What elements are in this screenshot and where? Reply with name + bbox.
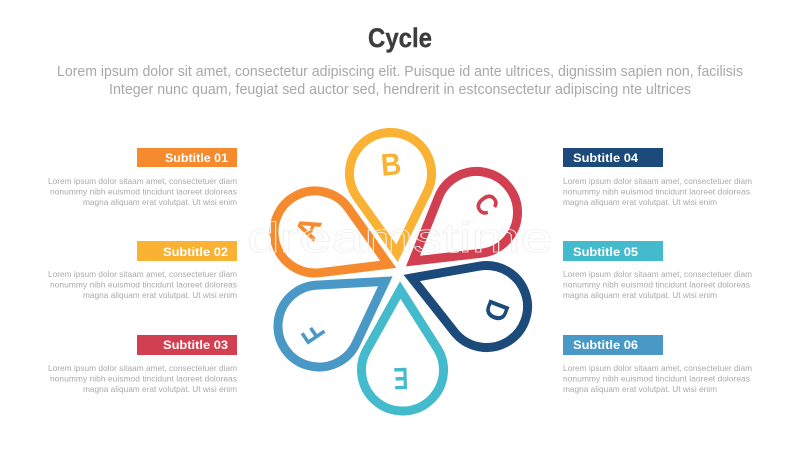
label: subtitle 02: Subtitle 02 — [163, 245, 228, 259]
text block: subtitle 05: nonummy nibh euismod tincidunt laoreet doloreas — [563, 280, 750, 290]
letter D: D — [476, 295, 516, 326]
letter E: E — [393, 361, 409, 396]
text block: subtitle 05 — [563, 269, 752, 300]
text block: subtitle 04: nonummy nibh euismod tincidunt laoreet doloreas — [563, 186, 750, 196]
label: subtitle 06 — [563, 335, 663, 355]
text block: subtitle 05: Lorem ipsum dolor sitaam amet, consectetuer diam — [563, 269, 752, 279]
label: subtitle 04 — [563, 148, 663, 167]
panel: subtitle 01 — [48, 148, 237, 207]
panel: subtitle 03 — [48, 335, 237, 394]
panel: subtitle 05 — [563, 241, 752, 300]
text block: subtitle 03 — [48, 363, 237, 394]
intro text — [57, 63, 743, 98]
text block: subtitle 01: magna aliquam erat volutpat. Ut wisi enim — [83, 197, 237, 207]
label: subtitle 05: Subtitle 05 — [573, 245, 638, 259]
label: subtitle 01 — [137, 148, 237, 167]
label: subtitle 05 — [563, 241, 663, 261]
petal F — [262, 247, 408, 383]
text block: subtitle 01: Lorem ipsum dolor sitaam amet, consectetuer diam — [48, 176, 237, 186]
text block: subtitle 05: magna aliquam erat volutpat. Ut wisi enim — [563, 290, 717, 300]
text block: subtitle 03: nonummy nibh euismod tincidunt laoreet doloreas — [50, 374, 237, 384]
text block: subtitle 02 — [48, 269, 237, 300]
label: subtitle 01: Subtitle 01 — [165, 151, 228, 165]
text block: subtitle 04: magna aliquam erat volutpat. Ut wisi enim — [563, 197, 717, 207]
panel: subtitle 06 — [563, 335, 752, 394]
text block: subtitle 02: magna aliquam erat volutpat. Ut wisi enim — [83, 290, 237, 300]
intro text: Lorem ipsum dolor sit amet, consectetur adipiscing elit. Puisque id ante ultrices, dignissim sapien non, facilisis — [57, 63, 743, 80]
panel: subtitle 02 — [48, 241, 237, 300]
petal B — [346, 129, 438, 257]
intro text: Integer nunc quam, feugiat sed auctor sed, hendrerit in estconsectetur adipiscing nte ultrices — [109, 81, 691, 98]
text block: subtitle 01: nonummy nibh euismod tincidunt laoreet doloreas — [50, 186, 237, 196]
text block: subtitle 06: magna aliquam erat volutpat. Ut wisi enim — [563, 384, 717, 394]
label: subtitle 06: Subtitle 06 — [573, 338, 638, 352]
label: subtitle 03: Subtitle 03 — [163, 338, 228, 352]
text block: subtitle 02: nonummy nibh euismod tincidunt laoreet doloreas — [50, 280, 237, 290]
text block: subtitle 03: magna aliquam erat volutpat. Ut wisi enim — [83, 384, 237, 394]
text block: subtitle 01 — [48, 176, 237, 207]
text block: subtitle 06 — [563, 363, 752, 394]
title: Cycle — [368, 23, 432, 53]
letter F: F — [295, 318, 332, 350]
text block: subtitle 06: Lorem ipsum dolor sitaam amet, consectetuer diam — [563, 363, 752, 373]
text block: subtitle 06: nonummy nibh euismod tincidunt laoreet doloreas — [563, 374, 750, 384]
label: subtitle 03 — [137, 335, 237, 355]
letter B: B — [380, 147, 403, 183]
label: subtitle 04: Subtitle 04 — [573, 151, 638, 165]
letter C: C — [466, 187, 505, 223]
petal E — [359, 289, 445, 412]
text block: subtitle 02: Lorem ipsum dolor sitaam amet, consectetuer diam — [48, 269, 237, 279]
petal C — [388, 155, 534, 294]
text block: subtitle 04: Lorem ipsum dolor sitaam amet, consectetuer diam — [563, 176, 752, 186]
label: subtitle 02 — [137, 241, 237, 261]
watermark: dreamstime — [247, 214, 553, 261]
text block: subtitle 03: Lorem ipsum dolor sitaam amet, consectetuer diam — [48, 363, 237, 373]
panel: subtitle 04 — [563, 148, 752, 207]
letter A: A — [288, 211, 329, 246]
text block: subtitle 04 — [563, 176, 752, 207]
petal A — [261, 178, 405, 302]
flower cycle diagram — [261, 129, 539, 412]
petal D — [397, 240, 539, 359]
